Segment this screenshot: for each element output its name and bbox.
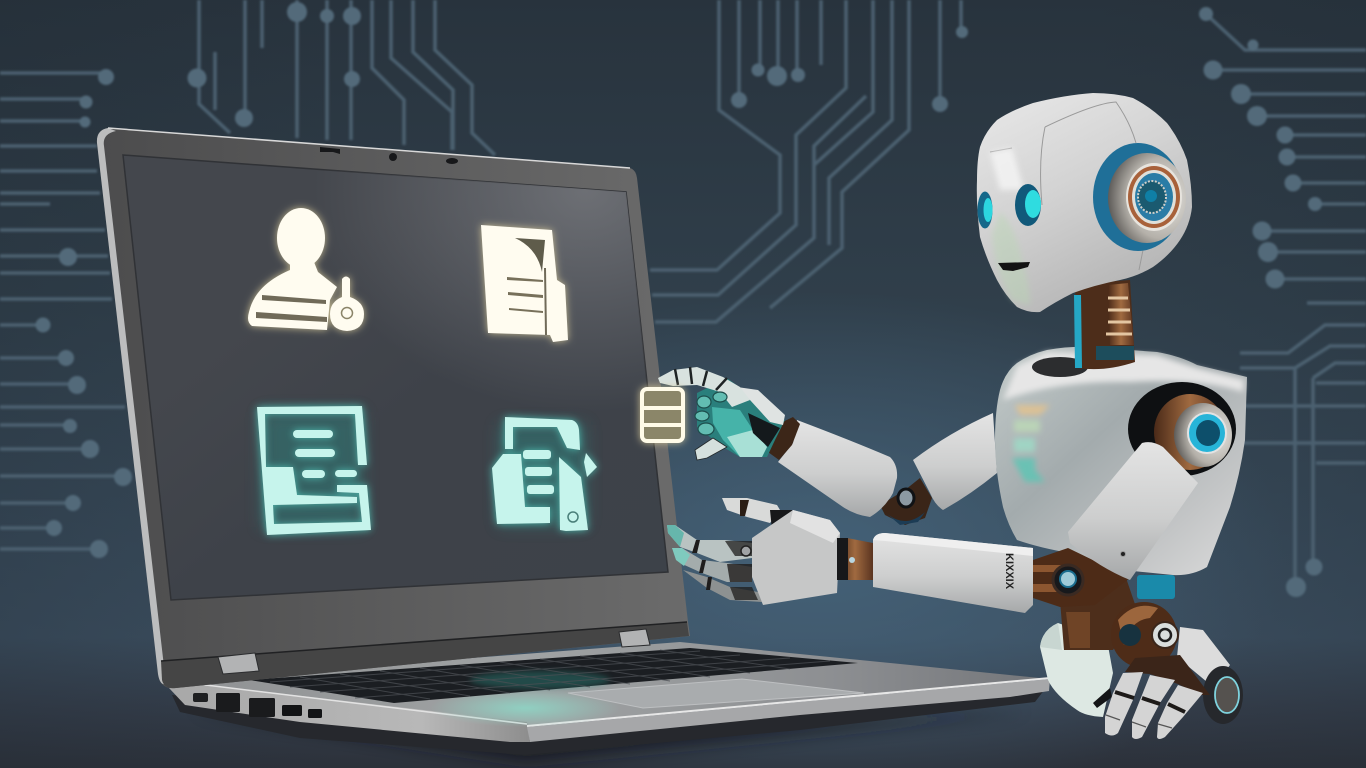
icon: teal printer document — [492, 417, 597, 531]
head — [977, 93, 1192, 312]
back of hand plate — [737, 387, 785, 425]
lower hand fingers — [667, 525, 762, 602]
screen top highlight — [108, 128, 630, 168]
thumb — [695, 438, 727, 460]
left eye — [978, 192, 992, 228]
icon: document with tab — [481, 225, 568, 342]
floating glowing tile — [642, 389, 683, 441]
forearm stamp: KIXXIX — [1003, 553, 1015, 590]
icon: person with key — [248, 208, 364, 331]
laptop front left face with ports — [169, 681, 530, 742]
trackpad — [568, 679, 864, 708]
wheel — [1203, 666, 1243, 724]
palm base — [697, 378, 785, 457]
head panel seams — [990, 102, 1143, 270]
shoulder socket — [1128, 382, 1236, 476]
laptop front right edge — [527, 679, 1050, 742]
keyboard — [249, 648, 858, 703]
neck — [1074, 280, 1135, 369]
lower wrist — [837, 538, 873, 580]
lid bottom bar — [161, 622, 689, 688]
laptop base underside — [172, 685, 1048, 755]
form inner tint — [262, 412, 362, 527]
icon: teal document form — [257, 406, 371, 535]
foot fingers — [1105, 672, 1203, 739]
screen — [123, 155, 668, 600]
waist column — [1060, 575, 1175, 650]
robot — [642, 93, 1247, 739]
shoulder copper joint — [1154, 394, 1226, 470]
lower hand thumb — [722, 498, 792, 530]
face reflection — [992, 212, 1030, 305]
lid silver edge — [97, 128, 166, 684]
face panel highlight — [990, 148, 1024, 190]
palm rest glow — [430, 689, 620, 727]
upper forearm — [778, 420, 897, 517]
knuckle block — [1125, 655, 1210, 695]
screen reflection on torso — [1012, 405, 1050, 482]
hip joint — [1111, 602, 1178, 668]
mouth — [998, 262, 1030, 271]
form outline — [257, 406, 371, 535]
upper arm cylinder — [1068, 442, 1198, 580]
lower limb white shell — [1177, 627, 1230, 687]
knuckles — [695, 392, 727, 435]
upper wrist — [768, 417, 800, 460]
seat cup — [1040, 623, 1113, 717]
shoulder silver cap — [1174, 403, 1232, 467]
lower arm elbow mechanics — [1033, 548, 1130, 607]
printer outline — [492, 417, 597, 531]
circuit traces: top left — [188, 0, 495, 155]
upper arm segment — [880, 413, 997, 525]
shoulder cyan ring — [1188, 413, 1226, 453]
torso — [995, 347, 1247, 575]
laptop base top surface — [173, 642, 1050, 727]
lower forearm — [873, 533, 1033, 613]
wrist shadow — [748, 413, 780, 447]
webcam details — [320, 147, 458, 164]
collar highlight — [1003, 352, 1244, 400]
circuit traces: right — [1199, 7, 1366, 597]
palm light — [712, 407, 767, 457]
circuit traces: left — [0, 69, 132, 558]
hinges — [218, 629, 650, 674]
right eye — [1015, 184, 1041, 226]
neck opening — [1032, 357, 1088, 377]
laptop shadow — [190, 710, 1030, 762]
laptop lid — [97, 128, 690, 688]
ear — [1093, 143, 1186, 251]
thumb tip — [1093, 688, 1112, 708]
printer inner tint — [500, 425, 585, 525]
top finger — [658, 367, 750, 407]
circuit traces: top centre — [650, 0, 968, 322]
laptop — [97, 128, 1050, 762]
lower hand back — [752, 510, 840, 605]
upper hand — [658, 367, 785, 460]
